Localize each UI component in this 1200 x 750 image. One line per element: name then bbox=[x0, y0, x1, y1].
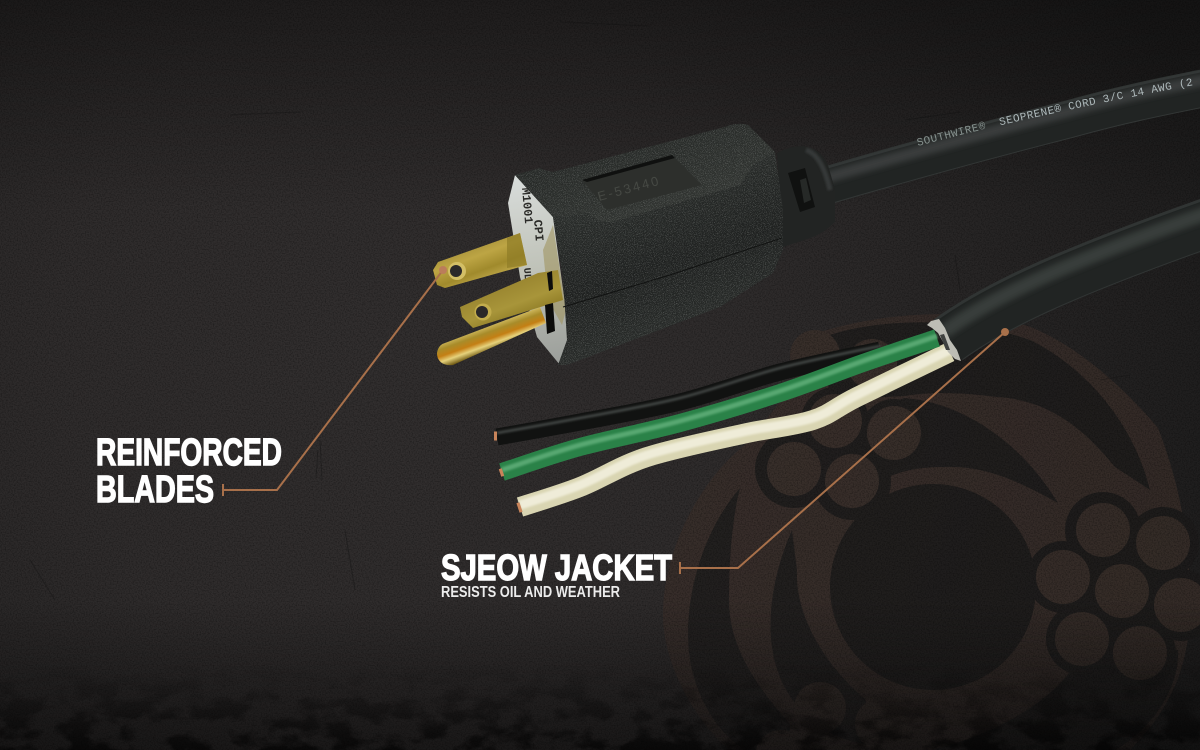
heading: SJEOW JACKET bbox=[441, 547, 672, 588]
heading bbox=[96, 432, 282, 511]
white wire bbox=[518, 350, 950, 508]
upper blade bbox=[433, 233, 527, 288]
top face bbox=[515, 124, 775, 222]
lower blade bbox=[460, 270, 563, 328]
face lettering: UL bbox=[520, 267, 532, 280]
heading: BLADES bbox=[96, 469, 214, 511]
label plate bbox=[582, 155, 702, 210]
jacketed cable bbox=[927, 212, 1200, 361]
stripped wires bbox=[494, 336, 950, 508]
face lettering bbox=[518, 187, 546, 280]
torn jacket edge bbox=[927, 319, 961, 361]
ground pin bbox=[437, 307, 546, 365]
face lettering: CPI bbox=[530, 219, 546, 242]
callout: reinforced blades bbox=[96, 266, 447, 511]
black wire bbox=[494, 346, 880, 437]
plug blades bbox=[433, 175, 570, 365]
plug strain relief collar bbox=[777, 146, 835, 247]
face of plug bbox=[508, 175, 570, 365]
green wire bbox=[500, 336, 937, 473]
cord legend text: SOUTHWIRE® SEOPRENE® CORD 3/C 14 AWG (2 bbox=[917, 78, 1192, 146]
subheading: RESISTS OIL AND WEATHER bbox=[441, 584, 620, 601]
heading: REINFORCED bbox=[96, 432, 282, 474]
watermark logo bbox=[663, 314, 1200, 750]
plug body bbox=[515, 124, 783, 365]
cord with printed legend bbox=[828, 70, 1200, 202]
plate marking: E-53440 bbox=[596, 173, 662, 204]
face lettering: M1001 bbox=[518, 187, 535, 224]
callout: sjeow jacket bbox=[441, 328, 1009, 601]
insulator slots bbox=[545, 303, 555, 334]
